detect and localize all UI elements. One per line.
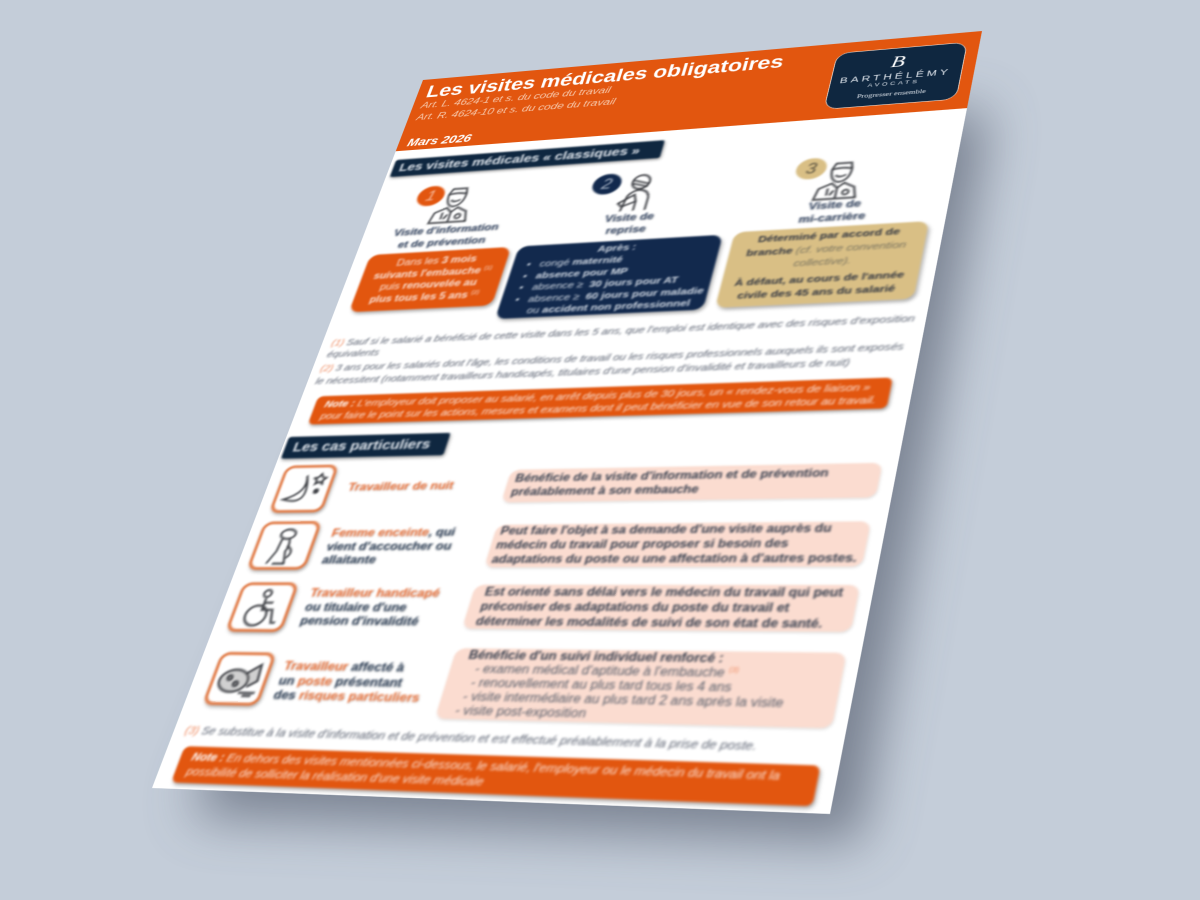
legal references xyxy=(415,84,617,122)
legal references: Art. R. 4624-10 et s. du code du travail xyxy=(415,96,617,122)
panel: disabled worker rule: Est orienté sans délai vers le médecin du travail qui peut xyxy=(483,586,844,600)
row label: high-risk worker: des risques particuliers xyxy=(271,687,422,705)
row icon: wheelchair xyxy=(225,582,299,632)
bullet list: ou accident non professionnel xyxy=(525,298,691,316)
step 1 badge xyxy=(414,185,448,207)
step 2 badge xyxy=(590,173,624,195)
logo name: BARTHÉLÉMY xyxy=(839,67,952,86)
step 3 label: Visite de xyxy=(807,198,862,212)
panel: night worker rule: Bénéficie de la visite d'information et de prévention xyxy=(514,467,830,485)
logo tagline: Progresser ensemble xyxy=(856,88,927,100)
panel: pregnant worker rule: médecin du travail pour proposer si besoin des xyxy=(494,537,790,552)
row label: high-risk worker: un poste présentant xyxy=(277,673,405,689)
step 1 label xyxy=(392,222,500,250)
step 3 label xyxy=(797,198,867,225)
panel: disabled worker rule xyxy=(462,585,860,632)
date: Mars 2026 xyxy=(405,132,473,149)
bullet list: • absence pour MP xyxy=(521,266,629,281)
header band xyxy=(396,31,982,151)
page body xyxy=(170,139,932,812)
row icon: pregnant woman xyxy=(246,521,322,570)
row label: disabled worker: Travailleur handicapé xyxy=(308,586,442,600)
step 1 badge: 1 xyxy=(423,188,438,204)
row label: disabled worker: pension d'invalidité xyxy=(298,614,421,628)
logo subtitle: AVOCATS xyxy=(867,78,920,89)
panel: navy return conditions xyxy=(495,235,723,319)
step 3 badge xyxy=(794,157,829,180)
step 1 label: Visite d'information xyxy=(392,222,500,238)
panel: pregnant worker rule: Peut faire l'objet à sa demande d'une visite auprès du xyxy=(499,522,833,537)
bullet list: • absence ≥ 60 jours pour maladie xyxy=(514,285,705,305)
callout: liaison note: Note : L'employeur doit proposer au salarié, en arrêt depuis plus de 30 jours, un « rendez-vous de liaison » xyxy=(323,382,872,410)
panel: orange timing box: suivants l'embauche (1) xyxy=(372,264,493,281)
heading: classic visits: Les visites médicales « classiques » xyxy=(397,145,642,174)
panel: tan mid-career box: Déterminé par accord de xyxy=(757,226,901,245)
row icon: night moon xyxy=(269,465,339,513)
callout: liaison note: pour faire le point sur les actions, mesures et examens dont il peut bénéficier en vue de son retour au travail. xyxy=(318,394,877,422)
row label: night worker: Travailleur de nuit xyxy=(346,479,456,493)
footnote 2: le nécessitent (notamment travailleurs handicapés, titulaires d'une pension d'invalidité et travailleurs de nuit) xyxy=(314,358,851,387)
row label: pregnant worker xyxy=(320,525,458,566)
row label: high-risk worker xyxy=(271,659,422,705)
footnote 1: équivalents xyxy=(325,348,381,360)
footnote 3: (3) Se substitue à la visite d'information et de prévention et est effectué préalablement à la prise de poste. xyxy=(183,725,758,753)
step 2 label: Visite de xyxy=(603,211,655,224)
panel: high-risk worker rule: - examen médical d'aptitude à l'embauche (3) xyxy=(473,663,740,680)
step 2 badge: 2 xyxy=(600,176,614,192)
panel: high-risk worker rule xyxy=(435,648,847,728)
box heading: Après : xyxy=(596,242,638,254)
title: Les visites médicales obligatoires xyxy=(424,52,786,101)
panel: orange timing box: Dans les 3 mois xyxy=(395,254,478,268)
panel: orange timing box: puis renouvelée au xyxy=(378,277,478,292)
bullet list: • congé maternité xyxy=(525,254,624,270)
bullet list: • absence ≥ 30 jours pour AT xyxy=(518,275,680,293)
logo xyxy=(823,42,968,110)
callout: closing note xyxy=(171,746,821,806)
row label: pregnant worker: Femme enceinte, qui xyxy=(330,525,457,539)
step 2 label xyxy=(603,211,656,236)
panel: tan mid-career box xyxy=(715,221,929,308)
panel: night worker rule xyxy=(501,463,883,503)
footnote 1: (1) Sauf si le salarié a bénéficié de cette visite dans les 5 ans, que l'emploi est identique avec des risques d'exposition xyxy=(330,314,916,348)
step 2 label: reprise xyxy=(604,223,647,236)
callout: closing note: Note : En dehors des visites mentionnées ci-dessous, le salarié, l'employeur ou le médecin du travail ont la xyxy=(190,751,781,783)
panel: pregnant worker rule: adaptations du poste ou une affectation à d'autres postes. xyxy=(490,552,858,566)
row label: disabled worker: ou titulaire d'une xyxy=(303,600,409,614)
heading: special cases: Les cas particuliers xyxy=(291,437,433,455)
panel: disabled worker rule: déterminer les modalités de suivi de son état de santé. xyxy=(474,615,824,631)
panel: high-risk worker rule: - visite intermédiaire au plus tard 2 ans après la visite xyxy=(461,690,785,710)
footnote 2: (2) 3 ans pour les salariés dont l'âge, les conditions de travail ou les risques professionnels auxquels ils sont exposés xyxy=(319,342,905,374)
step 1 label: et de prévention xyxy=(396,235,487,250)
panel: tan mid-career box: civile des 45 ans du salarié xyxy=(736,283,896,301)
row label: pregnant worker: allaitante xyxy=(320,553,378,566)
icon: doctor 1 xyxy=(426,186,470,226)
legal references: Art. L. 4624-1 et s. du code du travail xyxy=(419,84,612,110)
callout: liaison note xyxy=(308,378,893,425)
panel: tan mid-career box: collective). xyxy=(792,255,852,269)
step 3 label: mi-carrière xyxy=(797,210,866,225)
row label: pregnant worker: vient d'accoucher ou xyxy=(325,539,454,553)
panel: high-risk worker rule: Bénéficie d'un suivi individuel renforcé : xyxy=(467,649,725,666)
panel: night worker rule: préalablement à son embauche xyxy=(509,484,700,498)
panel: high-risk worker rule: - renouvellement au plus tard tous les 4 ans xyxy=(469,677,733,695)
panel: orange timing box xyxy=(349,247,511,312)
panel: tan mid-career box: branche (cf. votre convention xyxy=(745,239,907,258)
callout: closing note: possibilité de solliciter la réalisation d'une visite médicale xyxy=(184,766,485,789)
bullet list xyxy=(514,254,705,316)
document page xyxy=(152,31,982,814)
logo monogram: B xyxy=(889,52,907,71)
heading: special cases xyxy=(281,433,451,459)
panel: orange timing box: plus tous les 5 ans (2) xyxy=(368,288,481,305)
row label: disabled worker xyxy=(298,586,442,628)
row label: high-risk worker: Travailleur affecté à xyxy=(282,659,407,675)
panel: pregnant worker rule xyxy=(484,521,871,567)
panel: high-risk worker rule: - visite post-exposition xyxy=(453,704,588,721)
step 3 badge: 3 xyxy=(804,160,819,177)
panel: tan mid-career box: À défaut, au cours de l'année xyxy=(733,269,905,288)
icon: injured patient xyxy=(615,173,653,212)
row icon: hazardous machine xyxy=(202,652,277,706)
icon: doctor 3 xyxy=(810,160,858,202)
panel: disabled worker rule: préconiser des adaptations du poste du travail et xyxy=(479,601,791,615)
